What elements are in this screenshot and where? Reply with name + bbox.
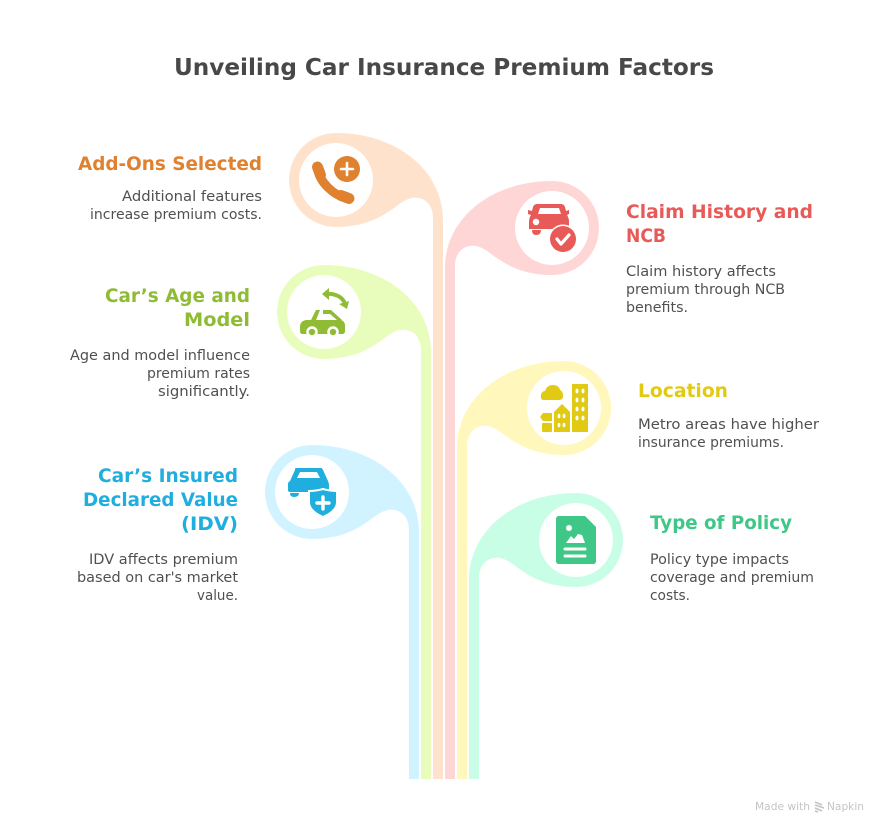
orange stem and bubble bbox=[289, 133, 443, 779]
description: claim history and NCB: premium through NCB bbox=[626, 282, 785, 298]
heading: claim history and NCB: NCB bbox=[626, 225, 666, 247]
heading: type of policy: Type of Policy bbox=[650, 512, 793, 534]
description: location: Metro areas have higher bbox=[638, 417, 819, 433]
heading: car's insured declared value bbox=[83, 465, 238, 535]
description: claim history and NCB: benefits. bbox=[626, 300, 688, 316]
icon: car with swap arrow bbox=[300, 288, 349, 336]
description: car's age and model: premium rates bbox=[147, 366, 250, 382]
description: location: insurance premiums. bbox=[638, 435, 784, 451]
white icon disc bbox=[275, 455, 349, 529]
heading: car's age and model bbox=[105, 285, 250, 331]
description: type of policy: coverage and premium bbox=[650, 570, 814, 586]
icon: car with shield bbox=[288, 468, 337, 517]
description: car's insured declared value bbox=[77, 552, 239, 604]
description: type of policy: costs. bbox=[650, 588, 690, 604]
heading: claim history and NCB: Claim History and bbox=[626, 201, 813, 223]
heading: claim history and NCB bbox=[626, 201, 813, 247]
icon: policy document bbox=[556, 516, 596, 564]
panel: car's age and model bbox=[70, 265, 431, 779]
description: claim history and NCB bbox=[626, 264, 785, 316]
description: type of policy: Policy type impacts bbox=[650, 552, 789, 568]
pink stem and bubble bbox=[445, 181, 599, 779]
heading: location: Location bbox=[638, 380, 728, 402]
description: location bbox=[638, 417, 819, 451]
title: Unveiling Car Insurance Premium Factors bbox=[174, 55, 714, 81]
footer: made with napkin bbox=[755, 800, 864, 813]
icon: city buildings bbox=[540, 384, 588, 432]
description: add-ons selected bbox=[90, 189, 262, 223]
heading: car's insured declared value: Declared Value bbox=[83, 489, 238, 511]
heading: car's age and model: Car’s Age and bbox=[105, 285, 250, 307]
footer: made with napkin: Made with bbox=[755, 800, 810, 813]
heading: car's insured declared value: Car’s Insured bbox=[98, 465, 238, 487]
description: car's age and model bbox=[70, 348, 250, 400]
panel: car's insured declared value bbox=[77, 445, 419, 779]
mint stem and bubble bbox=[469, 493, 623, 779]
heading: car's age and model: Model bbox=[184, 309, 250, 331]
description: car's age and model: Age and model influence bbox=[70, 348, 250, 364]
white icon disc bbox=[287, 275, 361, 349]
panel: add-ons selected bbox=[78, 133, 443, 779]
heading: add-ons selected: Add-Ons Selected bbox=[78, 153, 262, 175]
panel: type of policy bbox=[469, 493, 814, 779]
white icon disc bbox=[539, 503, 613, 577]
white icon disc bbox=[527, 371, 601, 445]
description: add-ons selected: Additional features bbox=[122, 189, 262, 205]
description: car's insured declared value: based on car's market bbox=[77, 570, 239, 586]
yellow stem and bubble bbox=[457, 361, 611, 779]
description: add-ons selected: increase premium costs. bbox=[90, 207, 262, 223]
white icon disc bbox=[515, 191, 589, 265]
panel: location bbox=[457, 361, 819, 779]
icon: phone with plus bbox=[318, 156, 360, 198]
description: type of policy bbox=[650, 552, 814, 604]
description: car's age and model: significantly. bbox=[158, 384, 250, 400]
footer: made with napkin: Napkin bbox=[827, 800, 864, 813]
blue stem and bubble bbox=[265, 445, 419, 779]
panel: claim history and NCB bbox=[445, 181, 813, 779]
white icon disc bbox=[299, 143, 373, 217]
description: claim history and NCB: Claim history affects bbox=[626, 264, 776, 280]
description: car's insured declared value: value. bbox=[197, 588, 238, 604]
green stem and bubble bbox=[277, 265, 431, 779]
heading: car's insured declared value: (IDV) bbox=[181, 513, 238, 535]
description: car's insured declared value: IDV affects premium bbox=[89, 552, 238, 568]
icon: car with check bbox=[528, 204, 578, 254]
